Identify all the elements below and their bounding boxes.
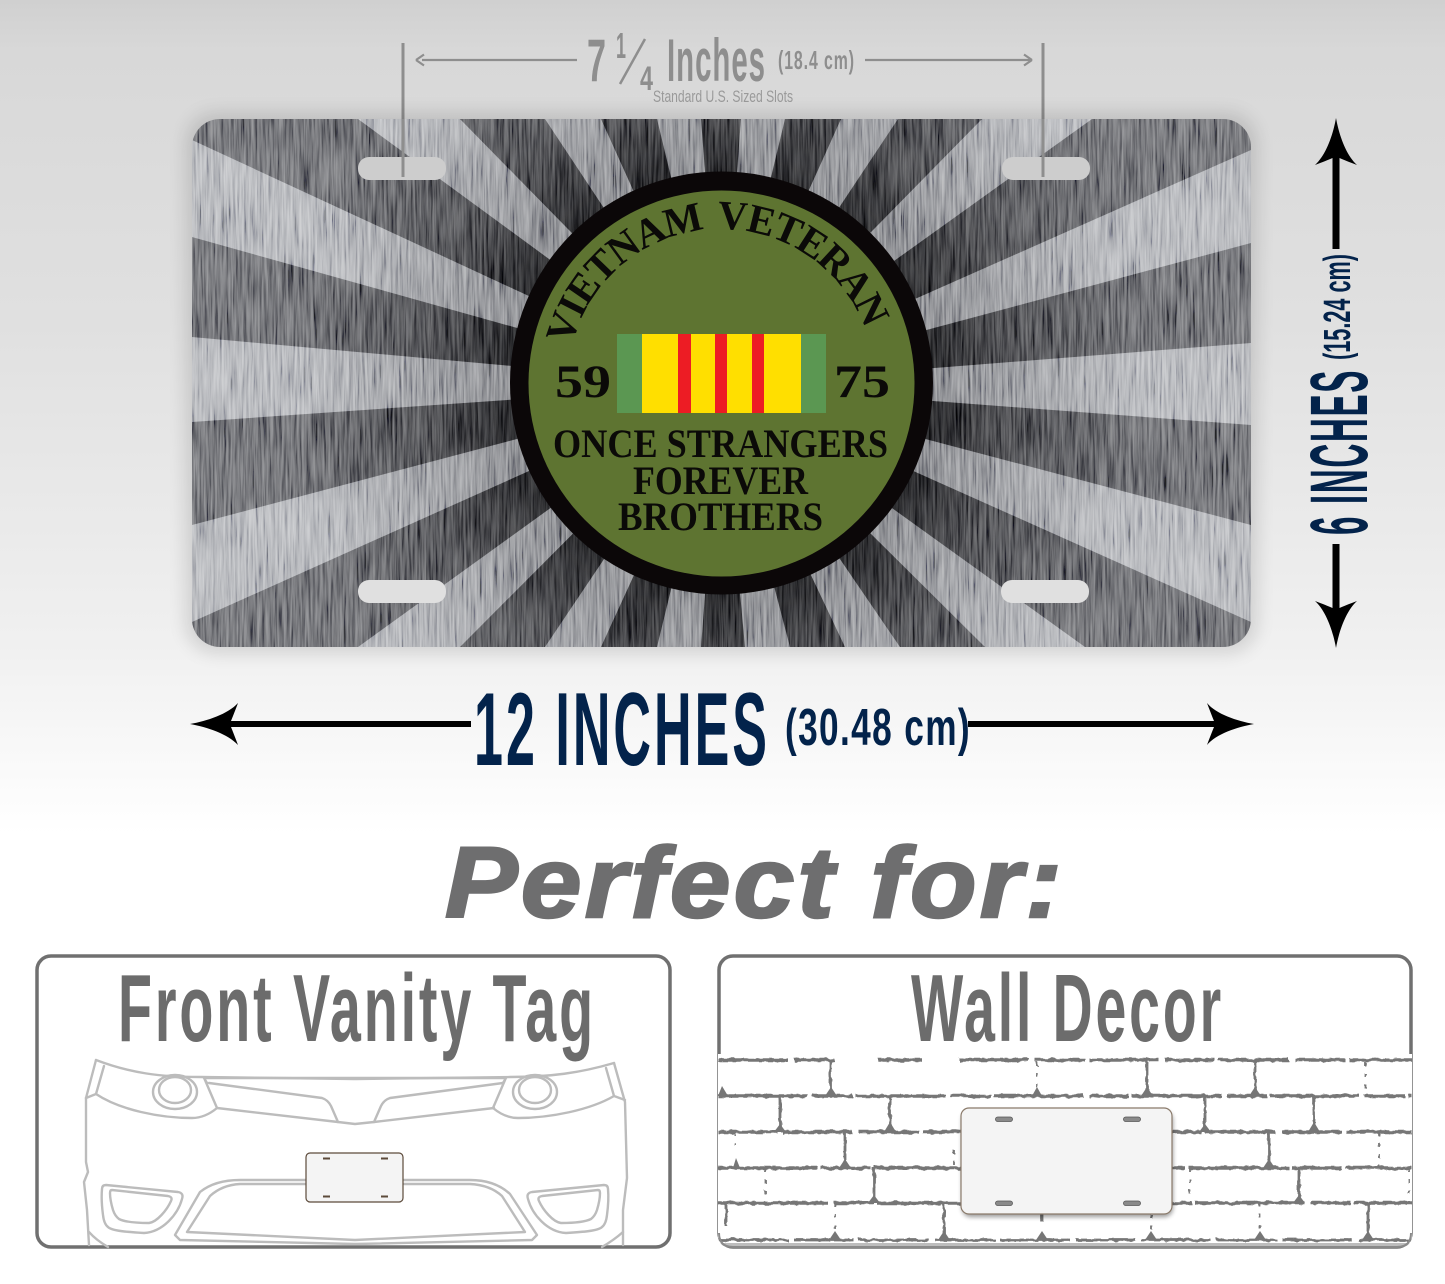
mounting slot bottom right <box>1001 580 1089 603</box>
width label: 12 INCHES <box>474 672 770 788</box>
slot width label: (18.4 cm) <box>778 45 855 75</box>
mortar joints <box>718 1086 1374 1240</box>
slot guide line right <box>1042 43 1044 177</box>
motto: BROTHERS <box>618 494 823 539</box>
heading: perfect for: Perfect for: <box>445 827 1065 939</box>
badge ring <box>510 172 933 594</box>
arrow down <box>1315 544 1357 648</box>
mounting slot top right <box>1002 157 1090 180</box>
redrawn guide line ends over slots <box>403 119 1043 177</box>
height dimension: 6 INCHES <box>1294 369 1385 535</box>
slot width label: Standard U.S. Sized Slots <box>653 87 793 106</box>
slot width label: 4 <box>640 60 653 98</box>
slot width label <box>587 25 855 106</box>
slot measurement: 7 1/4 inches <box>402 25 1044 177</box>
brushed metal sunburst <box>192 119 1251 647</box>
icon: wall plate shadow <box>962 1111 1173 1217</box>
motto: FOREVER <box>633 458 809 503</box>
mounting slot top left <box>358 157 446 180</box>
panel title: Front Vanity Tag <box>118 955 596 1062</box>
slot guide line left <box>402 43 404 177</box>
badge field <box>528 190 914 576</box>
mounting slot bottom left <box>358 580 446 603</box>
icon: car front outline <box>84 1060 627 1247</box>
height metric label: (15.24 cm) <box>1317 254 1359 360</box>
redrawn lower frame edge <box>719 1233 1411 1247</box>
license plate <box>192 119 1251 647</box>
arrow left <box>416 54 577 66</box>
plate shadow <box>186 113 1257 653</box>
panel frame <box>37 956 670 1247</box>
year 59: 59 <box>555 356 611 408</box>
motto: ONCE STRANGERS <box>553 421 888 466</box>
badge <box>510 172 933 594</box>
service ribbon <box>617 334 826 413</box>
arrow left <box>190 703 471 745</box>
arrow up <box>1315 118 1357 249</box>
slot width label: Inches <box>667 27 766 94</box>
panel: front vanity tag <box>37 955 670 1247</box>
year 75: 75 <box>834 356 890 408</box>
panel: wall decor <box>717 955 1414 1247</box>
width dimension <box>190 672 1254 788</box>
icon: small blank plate <box>306 1153 403 1202</box>
width metric label: (30.48 cm) <box>785 699 971 757</box>
arc heading: VIETNAM VETERAN <box>546 202 890 337</box>
arrow right <box>865 54 1032 66</box>
white brick wall <box>717 1054 1414 1246</box>
slot width label: 1 <box>616 25 626 66</box>
slot width label: 7 <box>587 27 606 94</box>
panel title: Wall Decor <box>911 955 1224 1062</box>
arrow right <box>968 703 1254 745</box>
panel frame <box>719 956 1411 1247</box>
icon: blank plate on wall <box>961 1108 1172 1214</box>
wall base line <box>718 1243 1412 1246</box>
motto <box>553 421 888 539</box>
